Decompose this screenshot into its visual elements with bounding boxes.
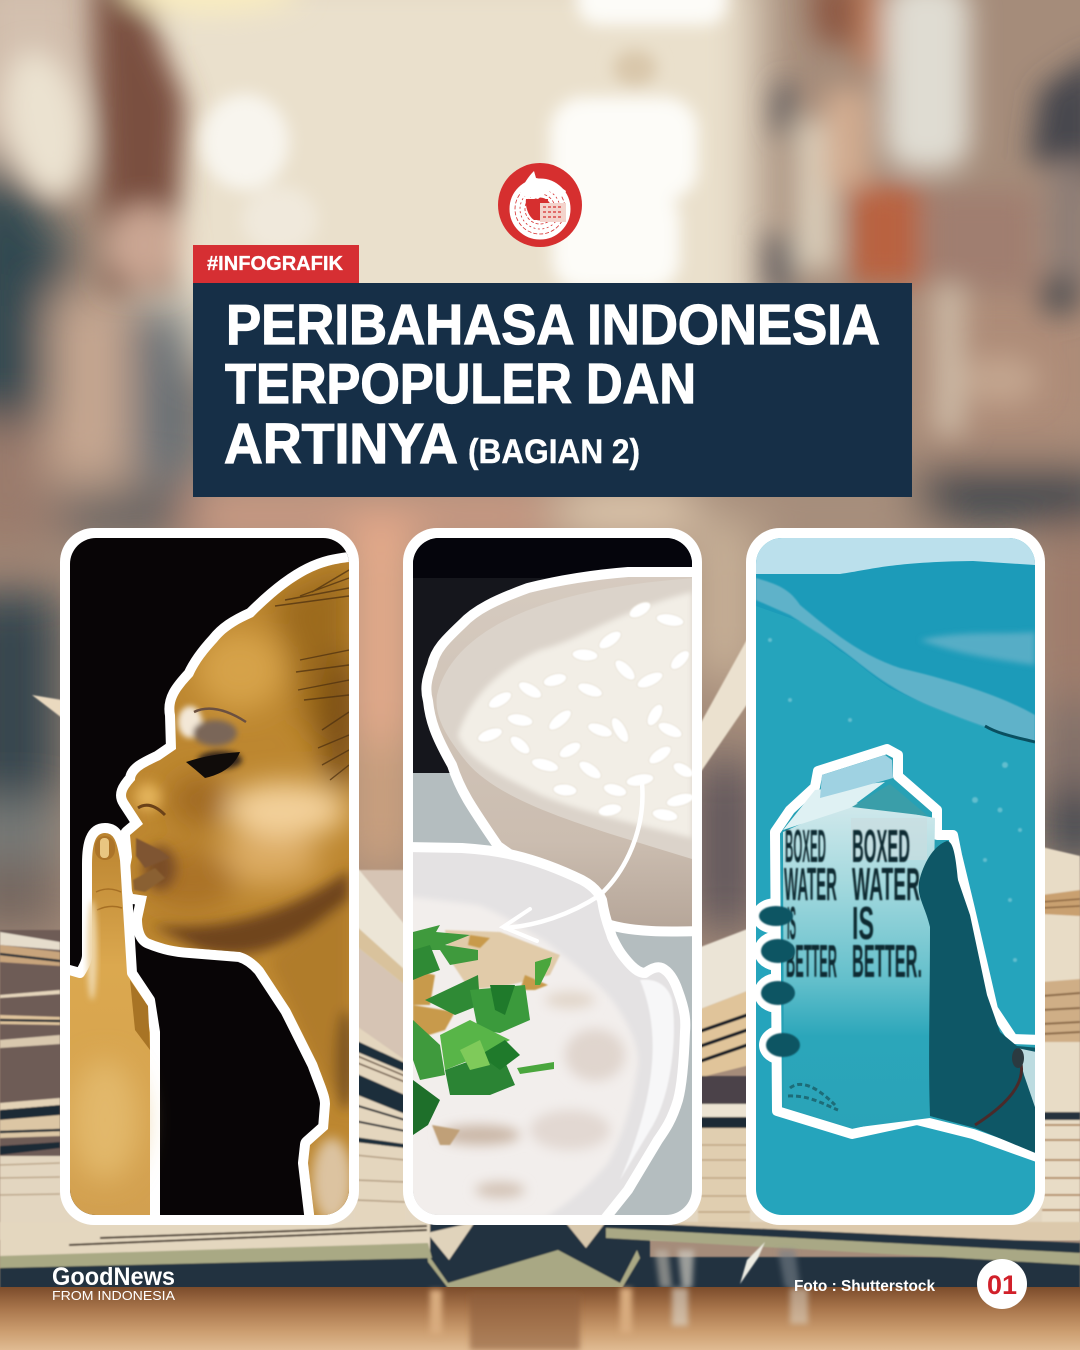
panel: woman hush (gold skin) [60,528,360,1225]
right strip [1042,847,1080,1240]
logo: GNFI garuda badge [498,163,582,247]
carton cutout: BOXED [852,820,910,872]
rice bowl [426,572,700,931]
gap 2 strip [698,634,750,776]
panel: rice becoming porridge [403,528,702,1225]
base page colour under panel corners [0,1150,1080,1240]
olive covers [0,1243,432,1268]
photo credit: Foto : Shutterstock [794,1278,935,1295]
carton cutout [759,749,1040,1158]
title: (BAGIAN 2) [468,433,640,471]
footer logo: GoodNews from Indonesia: FROM INDONESIA [52,1288,175,1303]
table [0,1287,1080,1350]
nose shadow [138,805,165,815]
footer logo: GoodNews from Indonesia: GoodNews [52,1263,175,1291]
finger halos [756,898,772,1062]
carton lettering: IS [852,897,874,949]
page number badge: 01 [987,1270,1017,1300]
eye [186,752,240,778]
page number badge [977,1259,1027,1309]
page stacks at the bottom [0,1222,470,1267]
illustration: open book on table [0,634,1080,1350]
porridge bowl [405,847,685,1225]
hand [919,841,1040,1155]
carton lettering: BETTER [786,935,837,987]
reflections of white streaks [655,1250,800,1288]
carton cutout: WATER [852,858,920,910]
dark under-book band [0,1257,1080,1290]
wave [756,561,1035,742]
herbs [413,925,554,1135]
tick page [32,695,62,718]
tag: #INFOGRAFIK [193,245,359,283]
arrow [503,783,642,941]
left page strip [0,930,62,1156]
fingers [759,906,800,1057]
panel: boxed water [746,528,1045,1225]
water speckles [768,638,1022,962]
spine [427,1250,640,1288]
carton cutout: BETTER. [852,935,922,987]
title: PERIBAHASA INDONESIA [226,293,880,357]
face cutout [120,555,360,1225]
hand cutout [62,828,155,1222]
fried shallots [413,930,560,1040]
footer logo: GoodNews from Indonesia [52,1263,175,1303]
tag: #INFOGRAFIK: #INFOGRAFIK [207,253,344,275]
carton lettering: BOXED [785,820,826,872]
middle-left strip [355,870,405,1230]
carton lettering: WATER [784,858,837,910]
title: TERPOPULER DAN [225,352,696,416]
hair streaks [275,570,349,780]
carton lettering: IS [787,897,796,949]
title [193,283,912,497]
title: ARTINYA [224,412,458,476]
lips [133,838,170,892]
carton lettering [784,820,922,987]
eye makeup [178,706,242,769]
